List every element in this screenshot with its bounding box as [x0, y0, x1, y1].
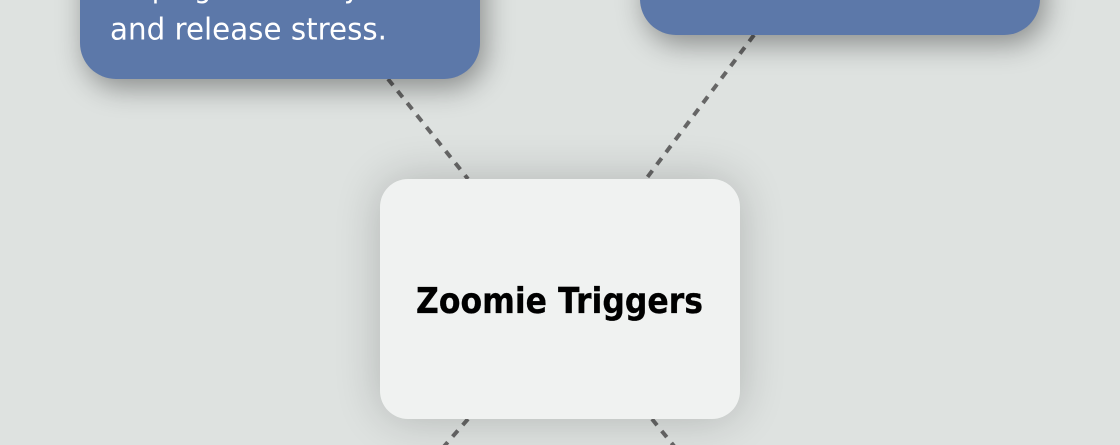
heading: Zoomie Triggers: Zoomie Triggers [416, 281, 703, 322]
panel: centre card [380, 179, 740, 419]
panel: right blue card [640, 0, 1040, 35]
text: left card body: and release stress. [110, 12, 387, 48]
panel: left blue card [80, 0, 480, 79]
